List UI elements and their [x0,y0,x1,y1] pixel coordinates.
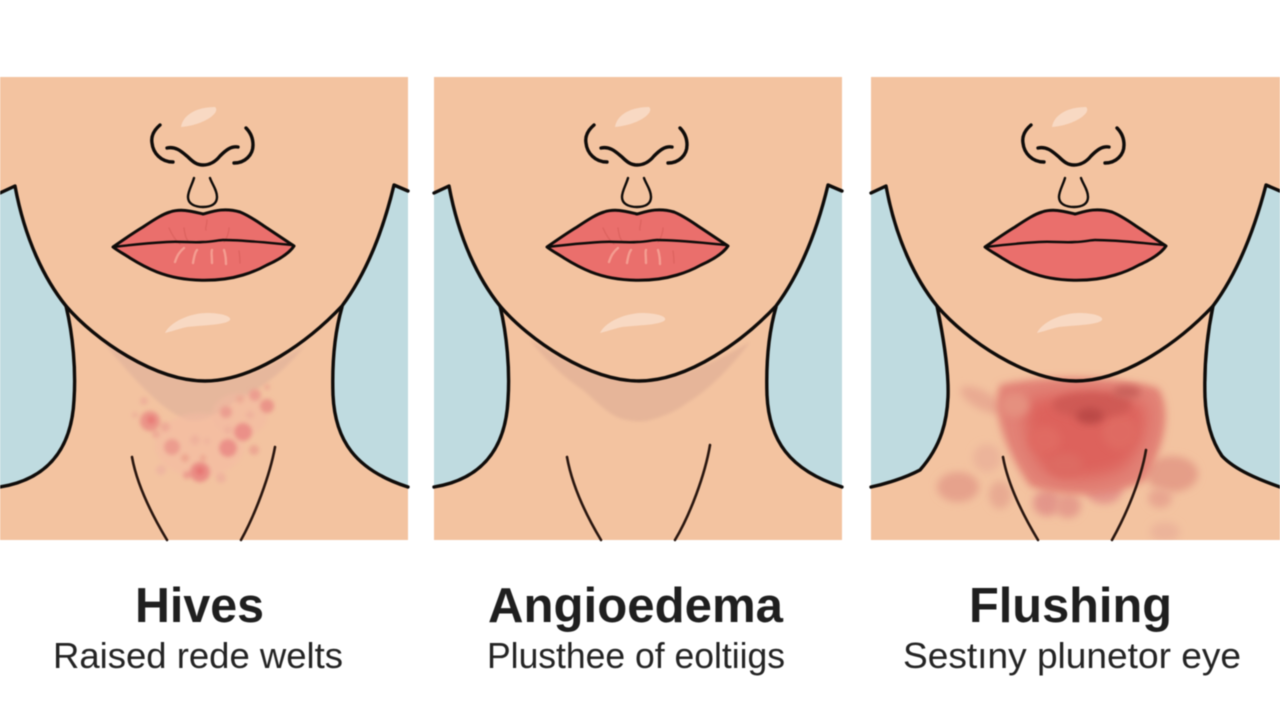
collarbone lines [1003,457,1038,540]
skin background [434,77,842,540]
heading: Hives: Hives [135,579,264,633]
mouth line [113,240,293,247]
panel: flushing [871,77,1280,542]
neck outlines [0,306,75,487]
lip wrinkles [169,220,240,264]
nose highlight [615,107,650,127]
neck shadow [530,340,750,422]
nose highlight [1052,107,1087,127]
chin highlight [1037,313,1102,333]
neck shadow [100,338,305,421]
skin background [871,77,1280,540]
lips [985,210,1166,280]
panel: hives [0,77,408,540]
nose highlight [181,107,216,127]
nose [586,125,687,207]
neck outlines [434,306,509,487]
blue background left [434,186,509,487]
chin highlight [165,313,230,333]
skin background [0,77,408,540]
lips [547,210,728,280]
collarbone lines [132,457,167,540]
mouth line [547,240,727,247]
blue background left [0,186,75,487]
nose [1023,125,1124,207]
flushing rash [937,378,1198,542]
jaw outline [871,185,1280,381]
rash: welts [132,384,274,483]
nose [152,125,253,207]
jaw outline [0,185,408,381]
blue background right [767,185,842,487]
blue background left [871,186,948,487]
chin highlight [600,313,665,333]
heading: Flushing: Flushing [969,579,1172,633]
mouth line [985,240,1165,247]
collarbone lines [567,457,601,540]
panel: angioedema [434,77,842,540]
face skin and outline details [434,107,842,540]
face skin and outline details [871,107,1280,540]
caption: Angioedema: Plusthee of eoltiigs [487,635,785,676]
caption: Flushing: Sestıny plunetor eye [903,635,1241,676]
heading: Angioedema: Angioedema [488,579,784,633]
lips [113,210,294,280]
blue background right [1205,185,1280,487]
jaw outline [434,185,842,381]
caption: Hives: Raised rede welts [53,635,343,676]
lip wrinkles [603,220,674,264]
face skin and outline details [0,107,408,540]
neck outlines [871,306,948,487]
blue background right [333,185,408,487]
rash body [997,378,1165,494]
